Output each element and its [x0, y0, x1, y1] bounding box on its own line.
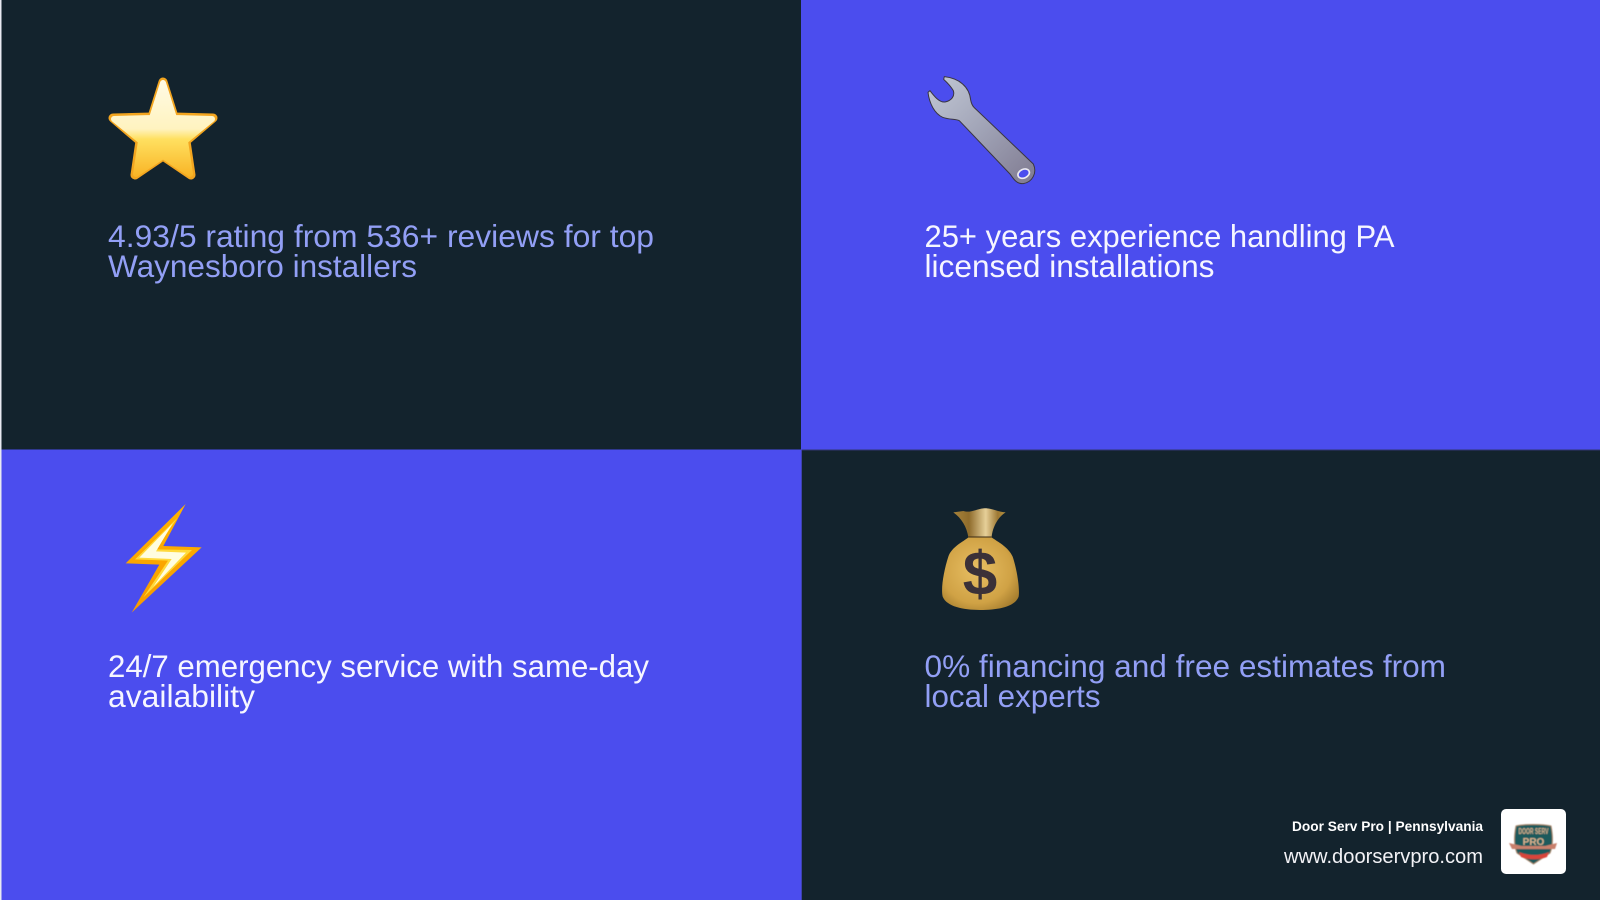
- text: experience claim: 25+ years experience handling PA: [924, 218, 1394, 254]
- panel background: blue: [2, 450, 802, 900]
- logo card: DOOR SERV: [1518, 827, 1549, 836]
- panel background: dark: [802, 450, 1600, 900]
- text: website: www.doorservpro.com: [1283, 846, 1483, 868]
- logo card: PRO: [1523, 837, 1545, 848]
- panel: rating: [2, 0, 801, 450]
- logo card: [1501, 809, 1566, 874]
- panel: financing: [802, 450, 1600, 900]
- footer: brand: [1283, 809, 1566, 874]
- text: financing claim: 0% financing and free estimates from: [924, 648, 1446, 684]
- text: emergency claim: 24/7 emergency service with same-day: [108, 648, 649, 684]
- text: financing claim: local experts: [924, 678, 1100, 714]
- text: experience claim: licensed installations: [924, 248, 1214, 284]
- text: emergency claim: [108, 648, 649, 714]
- text: emergency claim: availability: [108, 678, 255, 714]
- text: rating claim: 4.93/5 rating from 536+ reviews for top: [108, 218, 654, 254]
- text: rating claim: [108, 218, 654, 284]
- text: experience claim: [924, 218, 1394, 284]
- panel background: blue: [801, 0, 1600, 450]
- panel background: dark: [2, 0, 801, 450]
- panel: emergency service: [2, 450, 802, 900]
- icon: star: [113, 82, 213, 175]
- icon: wrench: [928, 77, 1035, 184]
- icon: money bag: [942, 508, 1019, 610]
- text: financing claim: [924, 648, 1446, 714]
- panel: experience: [801, 0, 1600, 450]
- icon: lightning bolt: [126, 504, 202, 613]
- text: brand name: Door Serv Pro | Pennsylvania: [1292, 819, 1483, 834]
- text: rating claim: Waynesboro installers: [108, 248, 417, 284]
- icon: dollar sign: $: [963, 540, 997, 609]
